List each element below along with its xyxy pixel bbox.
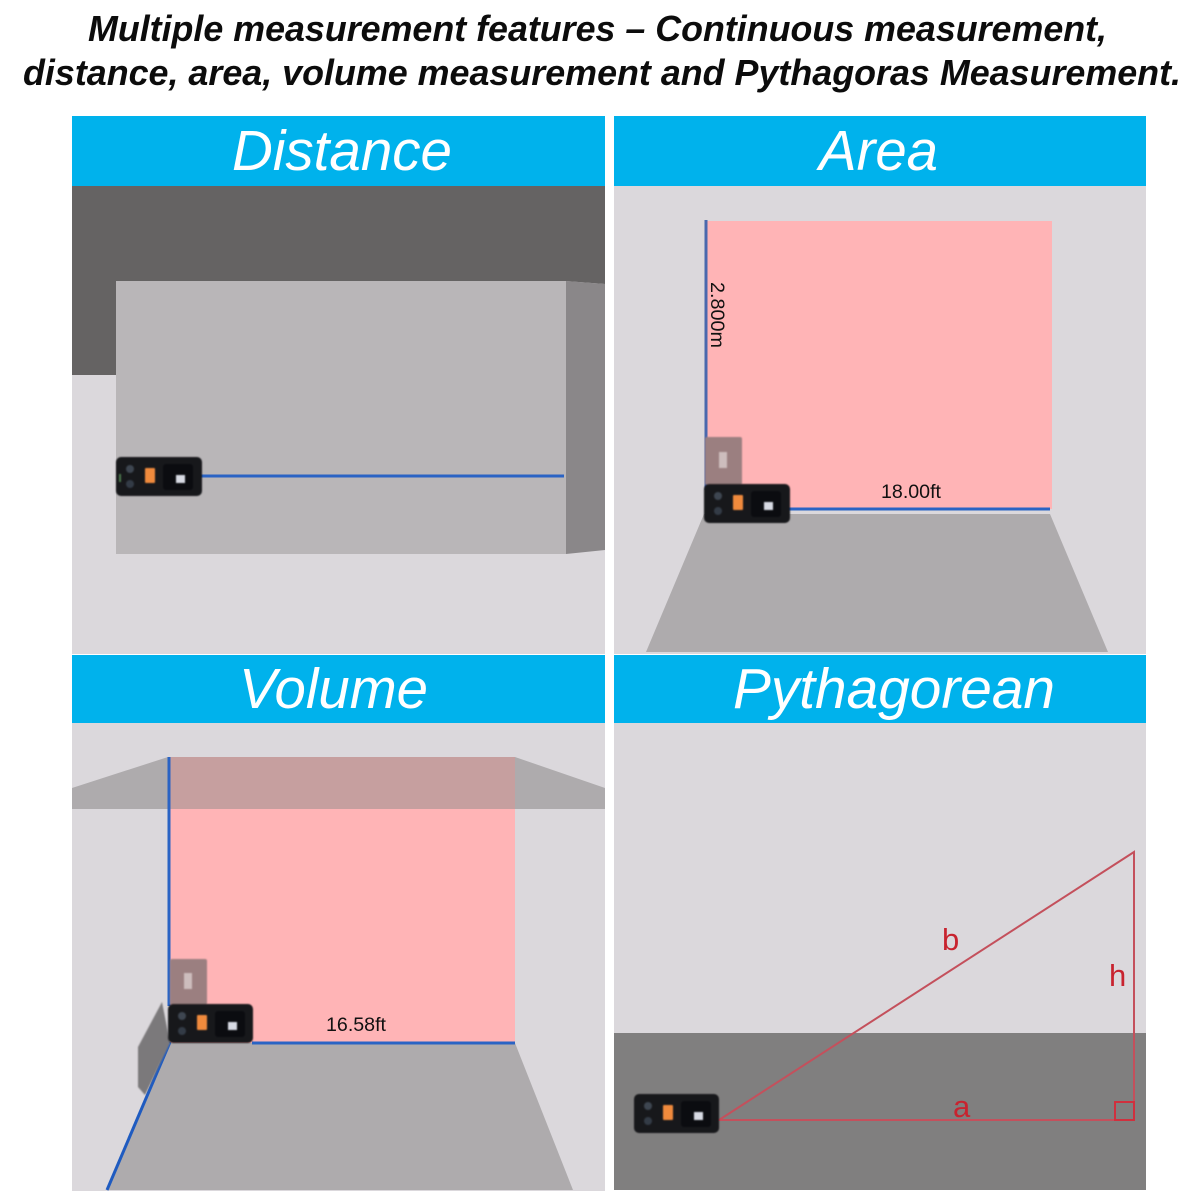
floor bbox=[108, 1043, 573, 1190]
header: area: Area bbox=[816, 119, 938, 182]
icon: meter bracket side bbox=[138, 1002, 170, 1095]
width label: 18.00ft bbox=[881, 482, 942, 503]
diagonal laser line bbox=[107, 1042, 170, 1190]
header: pythagorean: Pythagorean bbox=[733, 657, 1055, 720]
panel: pythagorean bbox=[614, 655, 1146, 1190]
triangle bbox=[719, 852, 1134, 1120]
header: distance: Distance bbox=[232, 119, 452, 182]
header: area bbox=[614, 116, 1146, 186]
back wall: dark bbox=[72, 186, 605, 375]
title: Multiple measurement features – Continuous measurement, bbox=[88, 8, 1107, 49]
header: distance bbox=[72, 116, 605, 186]
header: volume bbox=[72, 655, 605, 723]
ceiling overlap bbox=[170, 757, 515, 809]
vertical laser line bbox=[168, 757, 170, 1006]
dark floor bbox=[614, 1033, 1146, 1190]
vertical laser line bbox=[704, 220, 708, 490]
pink wall bbox=[707, 221, 1052, 509]
title: distance, area, volume measurement and Pythagoras Measurement. bbox=[23, 52, 1181, 93]
wall: front face bbox=[116, 281, 566, 554]
laser line bbox=[200, 474, 564, 478]
right angle mark bbox=[1115, 1102, 1134, 1120]
pink wall bbox=[170, 809, 515, 1043]
ceiling bbox=[72, 757, 605, 809]
height label: 2.800m bbox=[706, 282, 727, 348]
icon: laser meter bbox=[168, 1004, 253, 1043]
panel: area bbox=[614, 116, 1146, 654]
label a: a bbox=[953, 1089, 971, 1124]
width label: 16.58ft bbox=[326, 1015, 387, 1036]
icon: laser meter bbox=[634, 1094, 719, 1133]
horizontal laser line bbox=[252, 1042, 515, 1044]
title bbox=[23, 8, 1181, 93]
panel: volume bbox=[72, 655, 605, 1191]
label h: h bbox=[1109, 958, 1126, 993]
panel: distance bbox=[72, 116, 605, 654]
horizontal laser line bbox=[788, 508, 1050, 510]
wall: side face bbox=[566, 281, 605, 554]
icon: meter bracket top bbox=[170, 959, 207, 1005]
icon: laser meter bbox=[704, 484, 790, 523]
icon: laser meter bbox=[116, 457, 202, 496]
header: volume: Volume bbox=[239, 657, 428, 720]
icon: meter bracket bbox=[705, 437, 742, 485]
header: pythagorean bbox=[614, 655, 1146, 723]
floor bbox=[646, 514, 1108, 652]
label b: b bbox=[942, 922, 959, 957]
